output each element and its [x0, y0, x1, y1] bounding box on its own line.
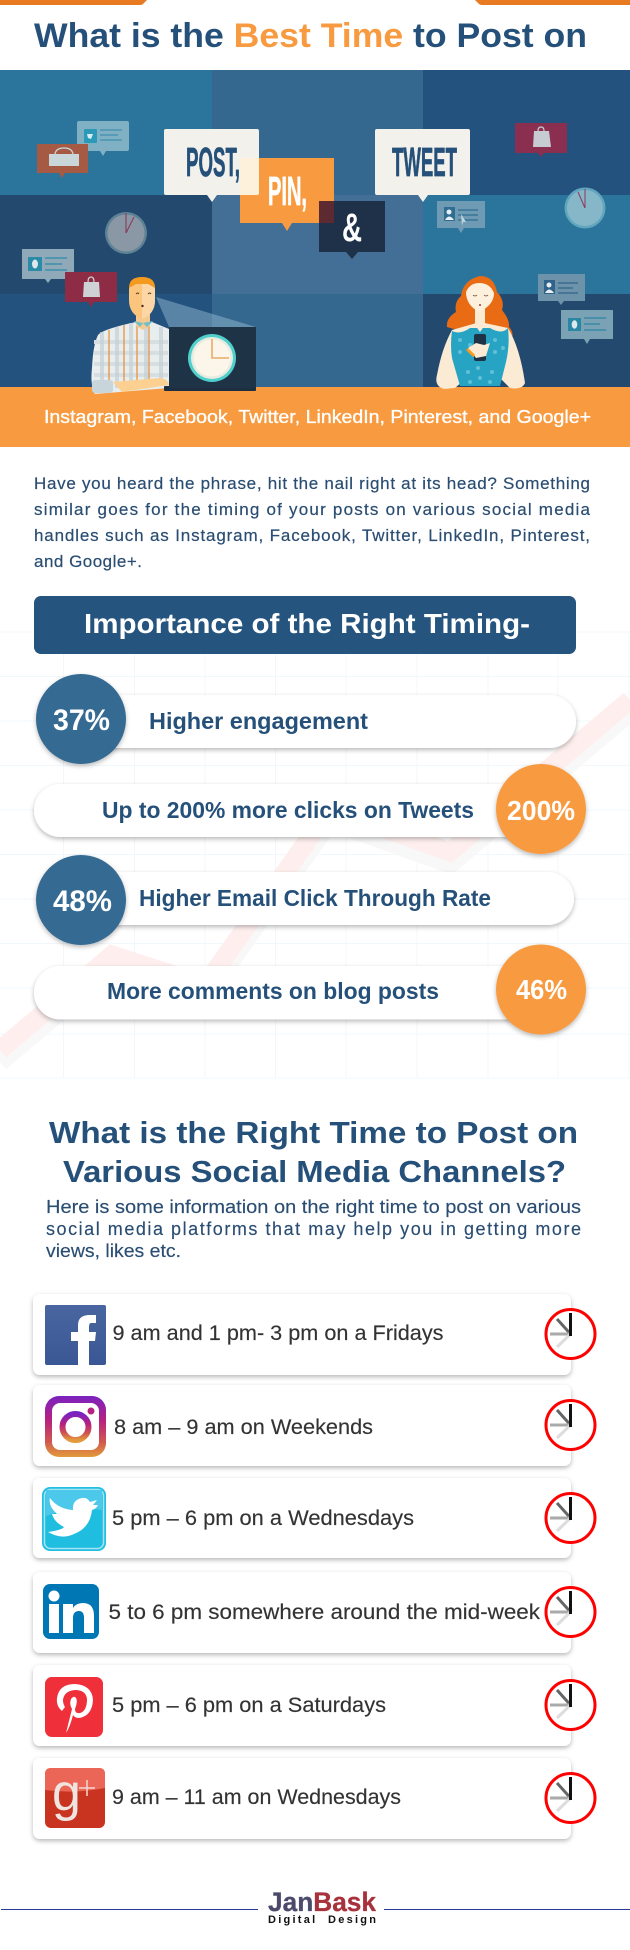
bubble: left profile card [22, 249, 74, 283]
intro paragraph: handles such as Instagram, Facebook, Twitter, LinkedIn, Pinterest, [34, 526, 590, 545]
channel row: LinkedIn [33, 1572, 595, 1653]
bubble: user card middle right [437, 201, 485, 233]
icon: clock [546, 1310, 595, 1358]
icon: wall clock left [105, 212, 147, 254]
channel row: Pinterest: 5 pm – 6 pm on a Saturdays [112, 1694, 386, 1717]
section description: social media platforms that may help you in getting more [46, 1219, 581, 1239]
speech bubble: POST [164, 129, 259, 202]
section description [46, 1197, 581, 1261]
bubble: red bag left [65, 272, 117, 307]
speech bubble: ampersand [319, 201, 385, 259]
head [129, 278, 155, 319]
channel row: Twitter [33, 1478, 595, 1558]
arms [436, 322, 525, 389]
channel row: Instagram [33, 1385, 595, 1466]
icon: clock [546, 1494, 595, 1542]
hero illustration [0, 70, 630, 447]
stat row: 37%: Higher engagement [149, 708, 368, 734]
icon: Google+ [45, 1764, 105, 1828]
bubble: right profile card [561, 310, 613, 344]
stat row: 48% [36, 855, 574, 945]
speech bubble: PIN: PIN, [268, 168, 307, 214]
top accent bars [0, 0, 630, 5]
intro paragraph: Have you heard the phrase, hit the nail right at its head? Something [34, 474, 590, 493]
icon: Facebook [45, 1305, 106, 1365]
phone and hands [474, 334, 486, 361]
icon: Google+: g [52, 1764, 81, 1822]
heading: right time to post: What is the Right Time to Post on [49, 1115, 578, 1150]
icon: wall clock right [564, 188, 606, 228]
icon: clock [546, 1400, 595, 1450]
illustration: man with laptop [91, 277, 256, 394]
speech bubble: PIN [240, 158, 334, 231]
illustration: woman with phone [436, 276, 525, 389]
icon: Instagram [45, 1396, 106, 1457]
stat row: 48%: 48% [53, 885, 112, 918]
bubble: twitter card [77, 121, 129, 156]
bubble: brown bag [37, 144, 88, 178]
icon: Twitter [42, 1487, 106, 1551]
hero background panels [0, 70, 630, 387]
icon: Pinterest [45, 1677, 103, 1737]
stat row: 200%: Up to 200% more clicks on Tweets [102, 797, 474, 823]
laptop clock [188, 334, 236, 382]
dress [451, 328, 509, 386]
section description: Here is some information on the right time to post on various [46, 1197, 581, 1217]
bubble: right user card [538, 274, 585, 305]
laptop [164, 386, 256, 391]
stat row: 46% [34, 944, 586, 1034]
section banner [34, 596, 576, 654]
footer rule and logo [1, 1887, 630, 1926]
icon: clock [546, 1588, 595, 1636]
heading: right time to post [49, 1115, 578, 1189]
icon: clock [546, 1680, 595, 1730]
logo tagline: Digital Design [268, 1914, 376, 1926]
title: What is the Best Time to Post on [34, 17, 587, 55]
neck and face [475, 305, 485, 332]
heading: right time to post: Various Social Media Channels? [63, 1154, 566, 1189]
light cone [156, 297, 256, 327]
importance section background grid and trend arrow [0, 632, 630, 1078]
intro paragraph: and Google+. [34, 552, 142, 571]
band text: Instagram, Facebook, Twitter, LinkedIn, Pinterest, and Google+ [44, 406, 591, 427]
section banner: Importance of the Right Timing- [84, 608, 530, 639]
channel row: Google+ [33, 1758, 595, 1839]
logo: JanBask: JanBask [268, 1887, 377, 1917]
section description: views, likes etc. [46, 1241, 181, 1261]
arm and cuff [113, 378, 169, 392]
speech bubble: TWEET [375, 129, 470, 202]
orange band [0, 387, 630, 447]
intro paragraph [34, 474, 591, 571]
intro paragraph: similar goes for the timing of your posts on various social media [34, 500, 591, 519]
stat row: 46%: 46% [516, 974, 567, 1005]
bubble: red bag top right [515, 123, 567, 157]
speech bubble: TWEET: TWEET [392, 139, 457, 185]
icon: clock [546, 1774, 595, 1822]
channel row: LinkedIn: 5 to 6 pm somewhere around the mid-week [108, 1601, 541, 1624]
icon: LinkedIn [43, 1584, 99, 1639]
stat row: 200% [34, 764, 586, 854]
shirt [91, 322, 169, 394]
stat row: 37%: 37% [53, 704, 110, 737]
channel row: Twitter: 5 pm – 6 pm on a Wednesdays [112, 1507, 414, 1530]
stat row: 37% [36, 674, 576, 764]
hair [447, 276, 513, 340]
stat row: 46%: More comments on blog posts [107, 978, 439, 1004]
channel row: Facebook [33, 1294, 595, 1375]
speech bubble: ampersand: & [342, 206, 362, 250]
channel row: Google+: 9 am – 11 am on Wednesdays [112, 1786, 401, 1809]
channel row: Pinterest [33, 1665, 595, 1746]
stat row: 200%: 200% [507, 795, 575, 826]
channel row: Instagram: 8 am – 9 am on Weekends [114, 1416, 373, 1439]
stat row: 48%: Higher Email Click Through Rate [139, 885, 491, 911]
speech bubble: POST: POST, [186, 139, 240, 185]
neck and collar [136, 312, 150, 330]
channel row: Facebook: 9 am and 1 pm- 3 pm on a Fridays [112, 1322, 443, 1345]
